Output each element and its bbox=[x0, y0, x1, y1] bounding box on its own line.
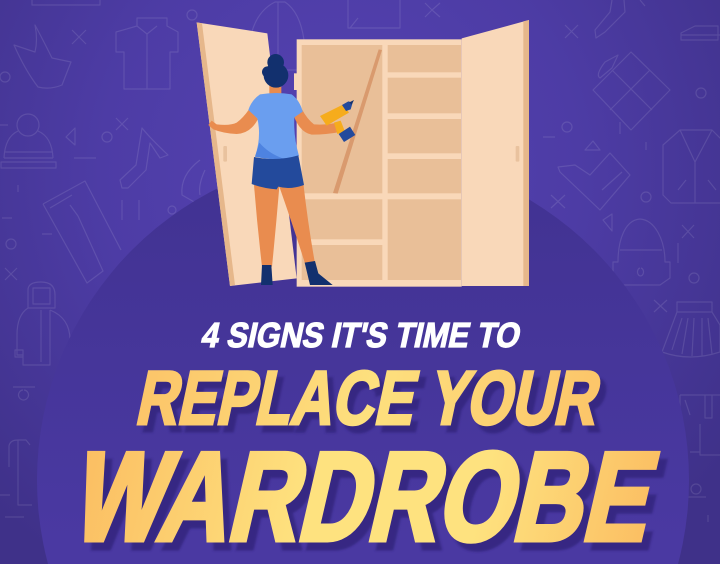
shorts bbox=[252, 155, 304, 189]
wardrobe illustration bbox=[197, 20, 529, 287]
icon: suit jacket bbox=[663, 130, 720, 203]
icon: shoe top right bbox=[595, 0, 645, 38]
title bbox=[63, 316, 677, 564]
woman with drill bbox=[208, 54, 355, 285]
icon: boot bbox=[558, 153, 630, 210]
boots bbox=[261, 261, 333, 285]
dome background bbox=[37, 154, 689, 564]
icon: iron bbox=[681, 26, 720, 40]
legs bbox=[254, 183, 315, 267]
icon: beanie hat bbox=[1, 114, 56, 168]
icon: leather hide bbox=[14, 25, 71, 88]
shirt shadow bbox=[255, 143, 283, 159]
icon: trousers bbox=[43, 181, 121, 283]
left door bbox=[197, 22, 297, 286]
icon: high heel bbox=[120, 128, 168, 188]
heading line: 4 signs: 4 SIGNS IT'S TIME TO bbox=[198, 316, 525, 355]
diagonal board bbox=[333, 49, 382, 194]
cabinet shelves bbox=[302, 45, 461, 280]
icon: trousers lower right bbox=[680, 395, 720, 455]
wardrobe cabinet bbox=[197, 20, 529, 287]
icon: glove bbox=[182, 160, 205, 203]
hair bbox=[262, 54, 288, 88]
icon: cropped garment lower left bbox=[0, 440, 32, 517]
neck bbox=[269, 84, 281, 96]
icon: shirt bbox=[116, 18, 178, 89]
icon: box top bbox=[348, 0, 400, 28]
pattern marks bbox=[5, 3, 694, 312]
cabinet frame bbox=[297, 39, 462, 287]
icon: hat brim lower left bbox=[13, 387, 35, 400]
drill bbox=[320, 100, 355, 142]
arms bbox=[208, 109, 343, 135]
right door bbox=[462, 20, 529, 286]
icon: skirt bbox=[662, 302, 720, 357]
icon: gift box bbox=[593, 52, 670, 130]
icon: hoodie bbox=[15, 282, 70, 365]
icon: jacket top bbox=[250, 2, 304, 70]
icon: handbag bbox=[613, 219, 670, 285]
shirt bbox=[248, 93, 303, 159]
